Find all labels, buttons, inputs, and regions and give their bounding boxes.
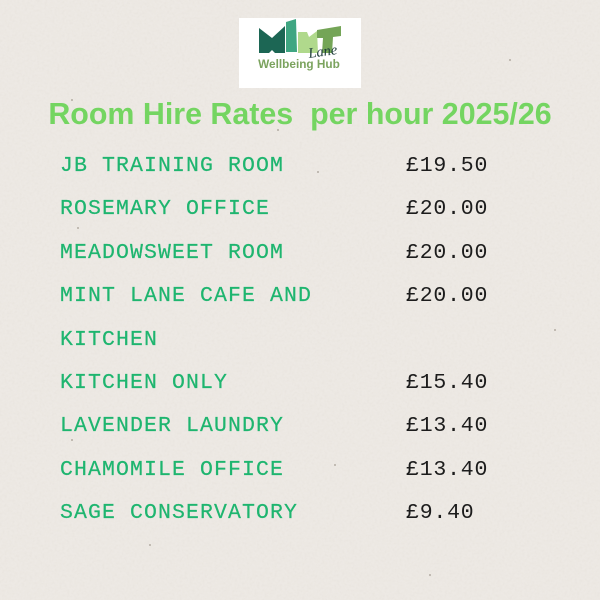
price: Kitchen Only: £15.40 xyxy=(406,371,488,395)
price: JB Training Room: £19.50 xyxy=(406,154,488,178)
logo letter I xyxy=(286,19,297,52)
room name: Mint Lane Cafe and Kitchen: MINT LANE CAFE AND KITCHEN xyxy=(60,284,312,352)
logo letter T xyxy=(317,26,341,53)
price: Mint Lane Cafe and Kitchen: £20.00 xyxy=(406,284,488,308)
room name: Lavender Laundry: LAVENDER LAUNDRY xyxy=(60,414,284,438)
room name: Chamomile Office: CHAMOMILE OFFICE xyxy=(60,458,284,482)
logo script word Lane: Lane xyxy=(306,42,339,62)
room name: Rosemary Office: ROSEMARY OFFICE xyxy=(60,197,270,221)
title: Room Hire Rates per hour 2025/26 xyxy=(48,97,552,131)
room name: Kitchen Only: KITCHEN ONLY xyxy=(60,371,228,395)
logo letter M xyxy=(259,26,285,53)
price: Sage Conservatory: £9.40 xyxy=(406,501,475,525)
price: Chamomile Office: £13.40 xyxy=(406,458,488,482)
logo letter N xyxy=(298,31,318,53)
room name: Sage Conservatory: SAGE CONSERVATORY xyxy=(60,501,298,525)
price: Lavender Laundry: £13.40 xyxy=(406,414,488,438)
room name: Meadowsweet Room: MEADOWSWEET ROOM xyxy=(60,241,284,265)
logo subtitle: Wellbeing Hub xyxy=(258,57,340,71)
price: Meadowsweet Room: £20.00 xyxy=(406,241,488,265)
room name: JB Training Room: JB TRAINING ROOM xyxy=(60,154,284,178)
price: Rosemary Office: £20.00 xyxy=(406,197,488,221)
logo: Mint Lane Wellbeing Hub xyxy=(239,18,361,88)
rate table xyxy=(60,154,488,525)
